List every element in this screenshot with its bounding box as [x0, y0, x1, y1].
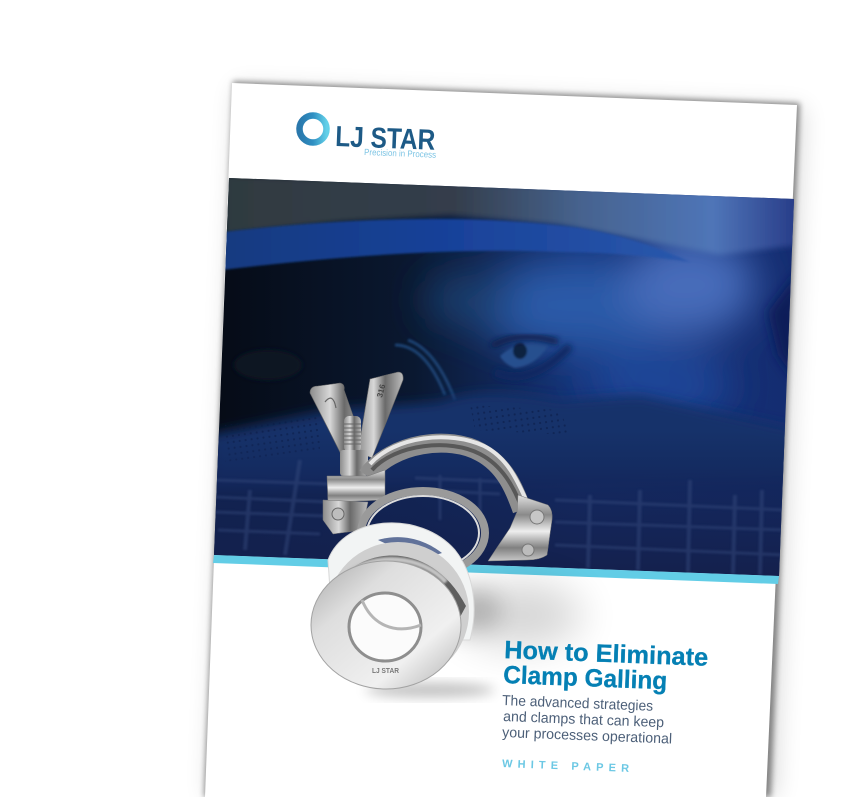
right dark shape — [764, 275, 791, 376]
icon: logo ring — [300, 116, 326, 142]
clamp upper arc — [367, 443, 522, 510]
back ferrule ring — [361, 491, 485, 575]
left lug upper — [327, 470, 385, 502]
goggle nose frame — [395, 340, 455, 400]
lug bolt left — [332, 508, 344, 520]
clamp shadow — [365, 583, 582, 697]
photo: blue tinted worker with visor and mask — [200, 170, 810, 590]
icon: wing nut right wing: 316 — [375, 383, 388, 399]
icon: nut base — [340, 450, 368, 476]
accent band — [213, 555, 779, 584]
subtitle: and clamps that can keep — [503, 709, 664, 731]
ferrule bore — [349, 593, 421, 661]
clamp arc top edge — [370, 437, 527, 502]
subtitle: The advanced strategies — [502, 693, 653, 715]
hair and hood top — [225, 175, 800, 255]
lower fade — [214, 456, 784, 576]
lug bolt upper right — [530, 510, 544, 524]
icon: wing nut left wing — [310, 383, 367, 462]
icon: threaded bolt — [344, 416, 361, 452]
visor band — [222, 219, 690, 270]
surgical mask — [210, 393, 800, 490]
left eye — [236, 352, 290, 378]
shoulder highlight — [348, 560, 446, 582]
left lug lower — [323, 500, 368, 534]
label: white paper: WHITE PAPER — [502, 758, 629, 775]
title: Clamp Galling — [503, 661, 668, 695]
logo wordmark: LJ STAR — [335, 121, 436, 157]
clamp arc highlight — [372, 445, 521, 506]
front ferrule side — [327, 542, 469, 682]
face highlight — [425, 235, 755, 425]
panel: cover page — [205, 83, 797, 797]
front ferrule shoulder — [331, 555, 466, 632]
title — [503, 636, 709, 695]
mask perforations — [225, 415, 320, 462]
refinery pipes — [215, 460, 785, 575]
infographic: white paper cover mockup — [199, 76, 811, 797]
page shadow — [204, 81, 804, 797]
lug bolt lower right — [522, 544, 534, 556]
white gasket — [328, 523, 474, 640]
logo — [300, 116, 437, 160]
logo tagline: Precision in Process — [364, 147, 437, 160]
clamp illustration — [310, 372, 552, 689]
gasket window — [378, 537, 442, 560]
photo base — [200, 170, 810, 590]
subtitle: your processes operational — [502, 725, 672, 748]
ferrule engraving: LJ STAR — [372, 668, 399, 675]
eye — [492, 337, 570, 376]
title: How to Eliminate — [504, 636, 709, 672]
icon: wing nut right wing — [358, 372, 403, 458]
subtitle — [502, 693, 672, 748]
front ferrule face — [311, 561, 461, 689]
bore inner ring — [362, 600, 421, 629]
back ferrule ring inner — [367, 496, 479, 570]
right lug — [488, 495, 552, 561]
